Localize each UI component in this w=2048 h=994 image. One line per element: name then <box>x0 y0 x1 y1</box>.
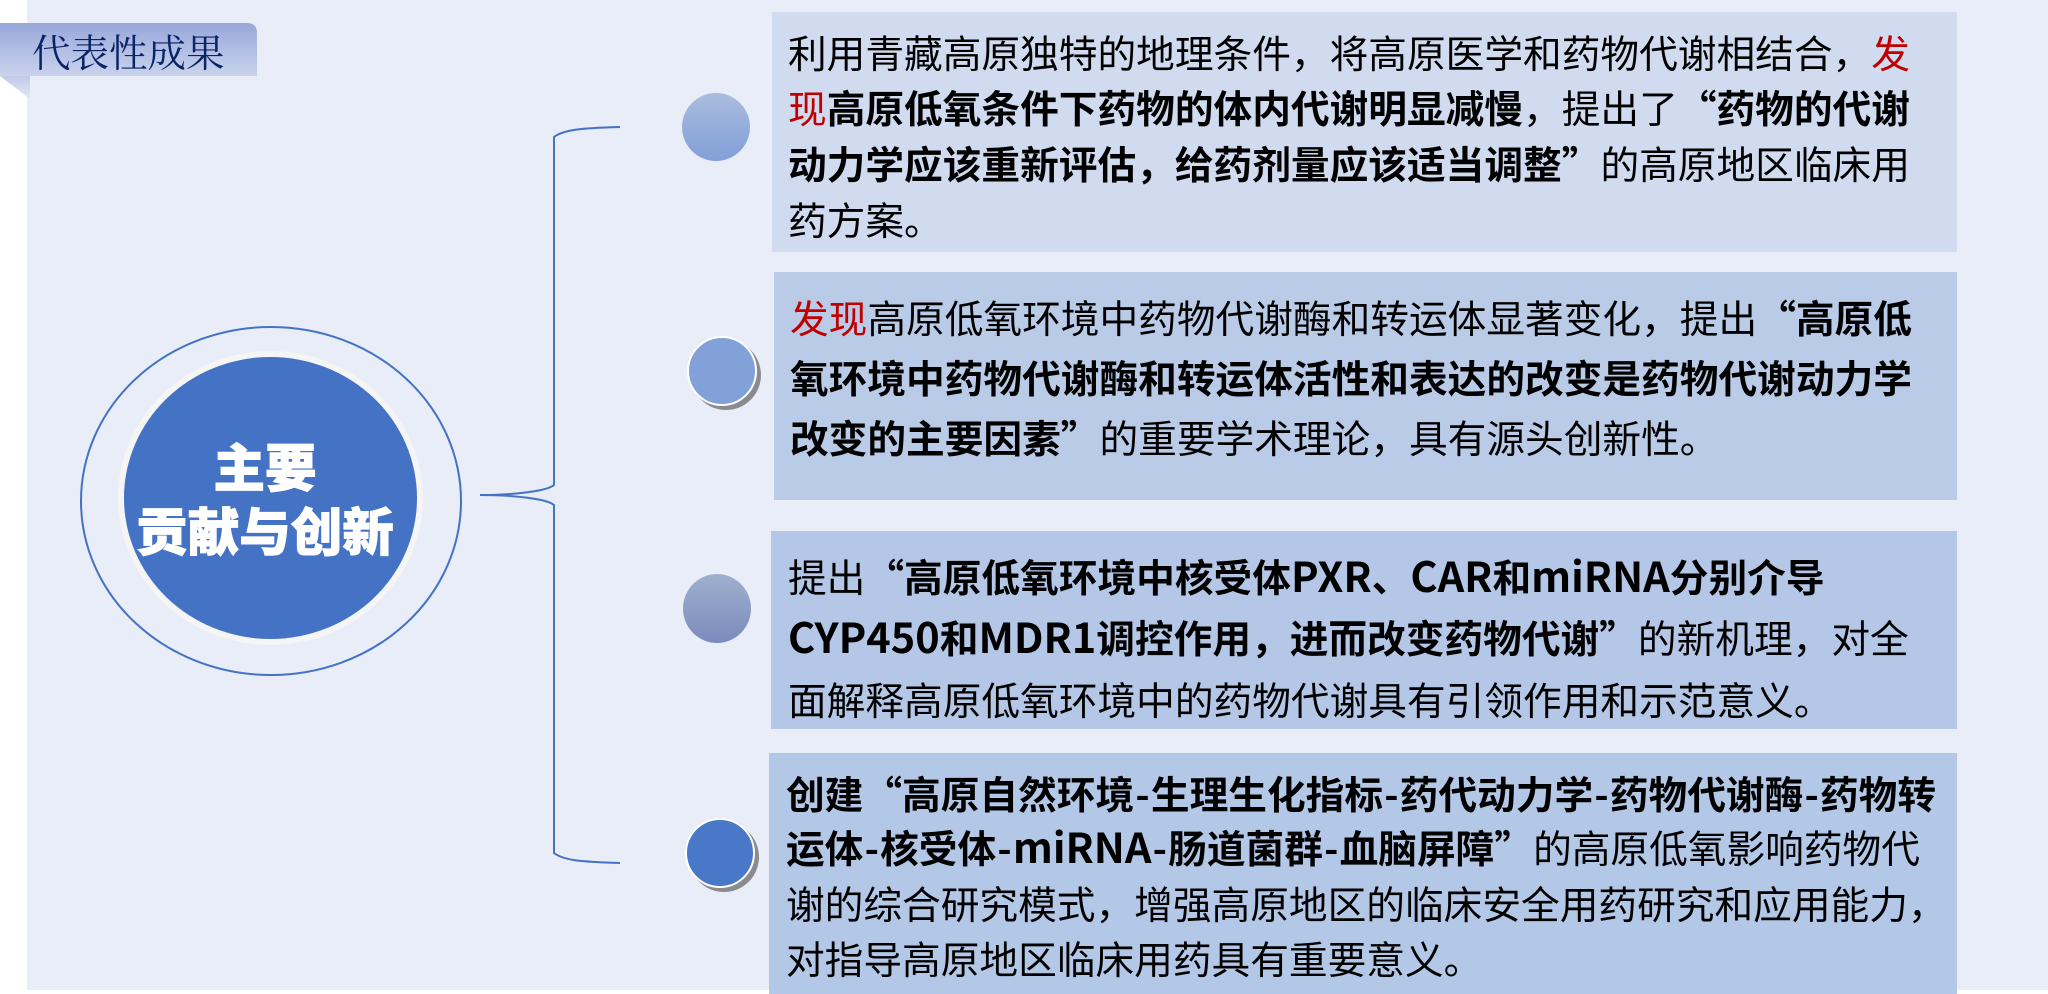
panel 4: - <box>1153 819 1167 875</box>
panel 2 <box>774 272 1957 500</box>
panel 4: - <box>1135 765 1150 821</box>
panel 1 <box>772 12 1957 252</box>
ribbon heading: 代表性成果: 代表性成果 <box>32 24 225 79</box>
ribbon heading: 代表性成果 <box>0 23 257 98</box>
panel 2: 改变的主要因素”的重要学术理论，具有源头创新性。 <box>790 409 1718 465</box>
panel 4: - <box>997 819 1012 875</box>
brace connector <box>480 126 620 864</box>
central circle: 主要贡献与创新: 贡献与创新 <box>136 491 394 566</box>
panel 3: CYP450和MDR1调控作用，进而改变药物代谢”的新机理，对全 <box>788 605 1909 665</box>
panel 1: 动力学应该重新评估，给药剂量应该适当调整”的高原地区临床用 <box>788 135 1910 191</box>
panel 3: 提出“高原低氧环境中核受体PXR、CAR和miRNA分别介导 <box>788 544 1825 604</box>
panel 1: 现高原低氧条件下药物的体内代谢明显减慢，提出了“药物的代谢 <box>788 79 1910 135</box>
panel 4: - <box>1324 819 1338 875</box>
panel 4 <box>769 753 1957 994</box>
bullet 4 <box>685 818 755 888</box>
central circle: 主要贡献与创新 <box>80 326 462 676</box>
panel 3: 面解释高原低氧环境中的药物代谢具有引领作用和示范意义。 <box>788 671 1833 727</box>
panel 4: - <box>1594 765 1609 821</box>
panel 4: - <box>1384 765 1399 821</box>
panel 2: 氧环境中药物代谢酶和转运体活性和表达的改变是药物代谢动力学 <box>790 349 1912 405</box>
bullet 1 <box>682 93 750 161</box>
central circle: 主要贡献与创新: 主要 <box>213 427 316 502</box>
panel 4: 创建“高原自然环境 生理生化指标 药代动力学 药物代谢酶 药物转 <box>786 765 1936 821</box>
panel 2: 发现高原低氧环境中药物代谢酶和转运体显著变化，提出“高原低 <box>790 289 1912 345</box>
bullet 3 <box>683 574 751 643</box>
panel 4: - <box>865 819 879 875</box>
panel 4: 运体 核受体 miRNA 肠道菌群 血脑屏障”的高原低氧影响药物代 <box>786 815 1920 875</box>
panel 1: 药方案。 <box>788 191 943 247</box>
bullet 2 <box>687 336 757 406</box>
panel 3 <box>771 531 1957 729</box>
panel 4: 对指导高原地区临床用药具有重要意义。 <box>786 930 1482 986</box>
panel 4: - <box>1804 765 1819 821</box>
panel 1: 利用青藏高原独特的地理条件，将高原医学和药物代谢相结合，发 <box>788 24 1910 80</box>
panel 4: 谢的综合研究模式，增强高原地区的临床安全用药研究和应用能力， <box>786 875 1947 931</box>
